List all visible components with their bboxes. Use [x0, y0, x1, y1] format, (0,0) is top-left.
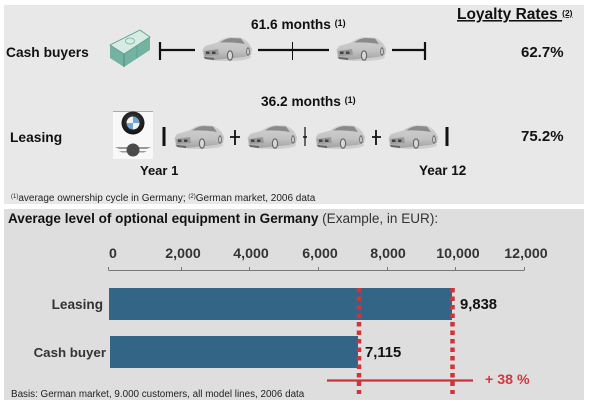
footnote: (2)	[188, 194, 196, 200]
chart title: Average level of optional equipment in Germany (Example, in EUR):	[8, 211, 438, 226]
label: year 1: Year 1	[140, 163, 178, 178]
red dotted markers	[359, 288, 452, 394]
value: leasing loyalty: 75.2%	[521, 128, 564, 145]
axis labels: 8,000	[370, 246, 406, 262]
timeline: cash buyers	[160, 37, 425, 61]
bar: leasing: Leasing	[52, 297, 103, 312]
axis labels: 10,000	[436, 246, 480, 262]
axis labels	[109, 246, 548, 262]
axis	[108, 267, 524, 270]
icon: banknote stack	[110, 30, 150, 67]
footnote: (1)	[11, 194, 18, 200]
axis labels: 0	[109, 246, 117, 262]
months label: cash: (1)	[335, 18, 346, 28]
axis labels: 4,000	[233, 246, 269, 262]
label: leasing: Leasing	[10, 130, 62, 145]
basis note: Basis: German market, 9.000 customers, all model lines, 2006 data	[11, 389, 305, 400]
panel: ownership cycles and loyalty	[4, 5, 584, 204]
bar: leasing	[52, 288, 497, 320]
bar: cash buyer: 7,115	[365, 345, 401, 361]
axis labels: 2,000	[165, 246, 201, 262]
bar: cash buyer	[34, 336, 401, 368]
months label: cash: 61.6 months	[251, 17, 331, 32]
panel: optional equipment chart	[4, 209, 584, 400]
heading: loyalty rates: Loyalty Rates	[457, 6, 558, 23]
footnote: German market, 2006 data	[196, 193, 316, 204]
axis labels: 6,000	[302, 246, 338, 262]
label: year 12: Year 12	[419, 163, 466, 178]
bar: cash buyer: Cash buyer	[34, 345, 106, 360]
axis labels: 12,000	[504, 246, 548, 262]
callout: plus 38 percent: + 38 %	[485, 372, 530, 388]
icon: BMW and MINI logos	[113, 111, 153, 159]
label: cash buyers: Cash buyers	[6, 45, 89, 60]
timeline: leasing	[164, 125, 447, 149]
months label: leasing: (1)	[345, 95, 356, 105]
difference line	[327, 379, 473, 382]
bar: leasing: 9,838	[460, 297, 497, 313]
value: cash loyalty: 62.7%	[521, 44, 564, 61]
heading: loyalty rates: (2)	[562, 8, 573, 18]
footnote: average ownership cycle in Germany;	[18, 193, 188, 204]
months label: leasing: 36.2 months	[261, 94, 341, 109]
